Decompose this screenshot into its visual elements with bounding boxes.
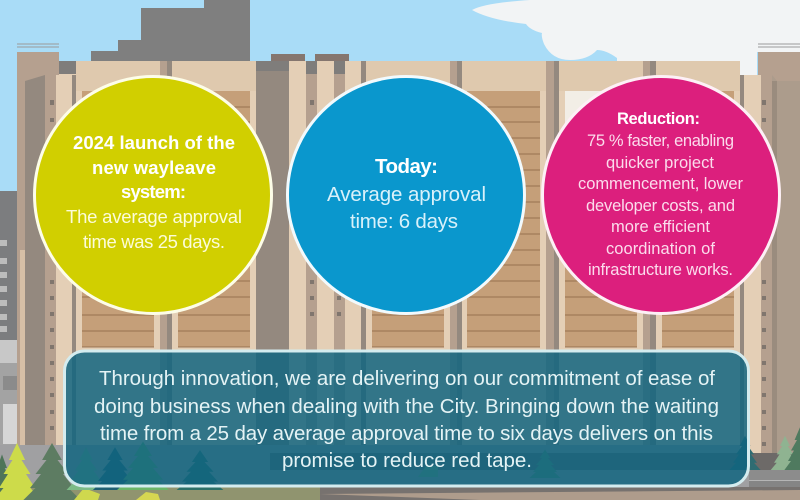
- trees: [0, 427, 800, 500]
- cloud: [472, 0, 800, 75]
- pink circle body line 6: coordination of: [606, 240, 715, 258]
- pink circle body line 5: more efficient: [611, 218, 710, 236]
- circle: 2024 launch: [34, 76, 272, 314]
- pale upper panel: [565, 91, 625, 141]
- callout text line 1: Through innovation, we are delivering on our commitment of ease of: [99, 367, 715, 390]
- blue circle body: Average approval: [327, 183, 486, 206]
- yellow circle heading: 2024 launch of the: [73, 132, 235, 153]
- left background building: [0, 191, 19, 453]
- circle: today: [288, 76, 524, 314]
- pink circle body line 4: developer costs, and: [586, 197, 735, 215]
- pink circle body line 3: commencement, lower: [578, 175, 744, 193]
- right tower: [744, 44, 800, 453]
- yellow circle heading line 3: system:: [121, 181, 186, 202]
- callout panel: [64, 351, 748, 486]
- main building: [59, 61, 757, 453]
- column rivets: [50, 100, 766, 446]
- cladding floor lines: [82, 107, 734, 347]
- background dark tower: [91, 0, 250, 62]
- blue circle heading: Today:: [375, 155, 438, 178]
- brown cladding panels: [82, 91, 734, 347]
- pink circle heading: Reduction:: [617, 110, 700, 128]
- pink circle body line 2: quicker project: [606, 154, 714, 172]
- callout text line 4: promise to reduce red tape.: [282, 449, 532, 472]
- ground: [0, 445, 800, 500]
- yellow circle body line 2: time was 25 days.: [83, 231, 225, 252]
- yellow circle body: The average approval: [66, 206, 242, 227]
- circle: reduction: [542, 76, 780, 314]
- callout text line 2: doing business when dealing with the City. Bringing down the waiting: [94, 395, 719, 418]
- left tower: [17, 44, 72, 445]
- yellow circle heading line 2: new wayleave: [92, 157, 216, 178]
- callout text line 3: time from a 25 day average approval time to six days delivers on this: [100, 422, 713, 445]
- blue circle body line 2: time: 6 days: [350, 210, 458, 233]
- pink circle body line 7: infrastructure works.: [588, 261, 733, 279]
- pink circle body: 75 % faster, enabling: [587, 132, 734, 150]
- building columns: [59, 54, 744, 445]
